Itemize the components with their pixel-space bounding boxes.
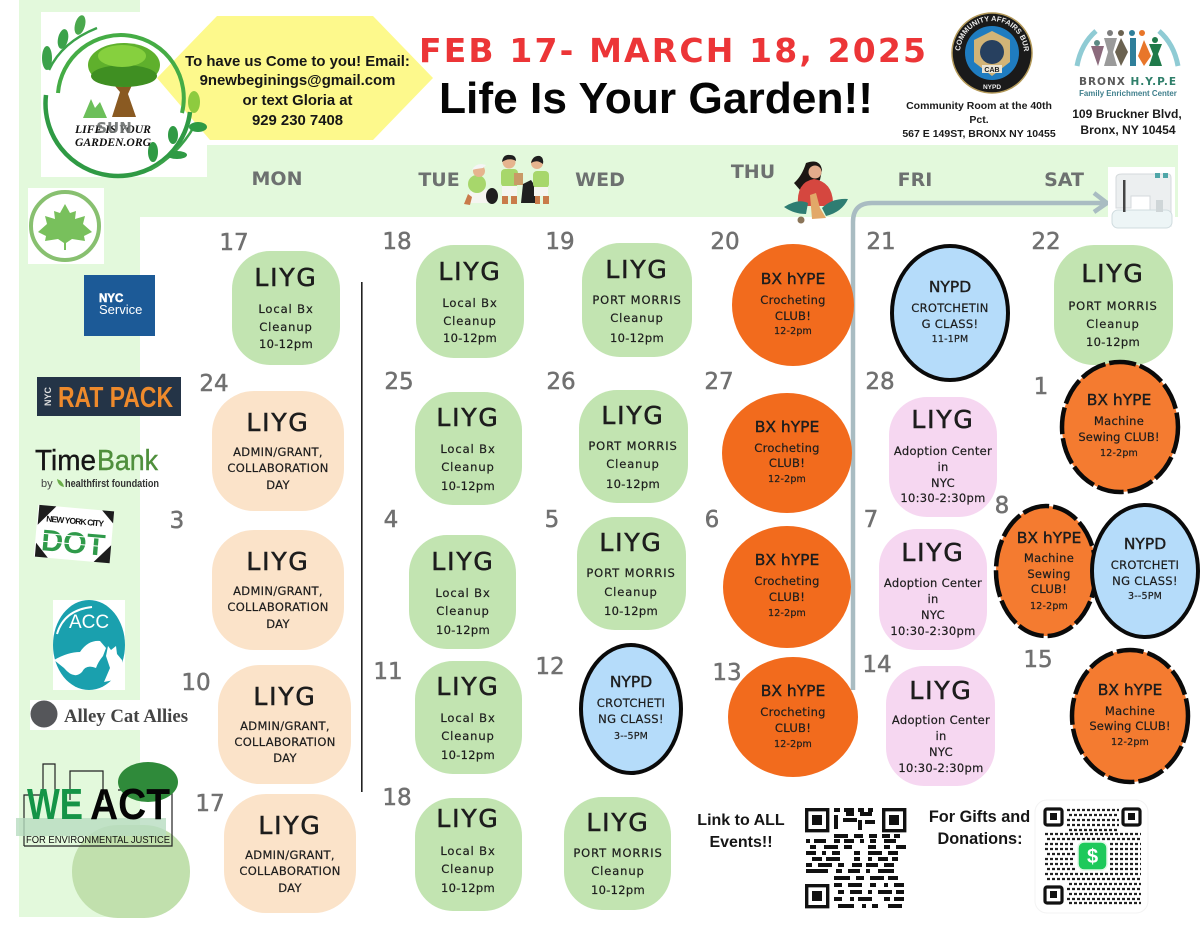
icon: people cleaning up	[464, 155, 549, 205]
event: Mar 3 admin: DAY	[266, 617, 290, 631]
event: Mar 11 cleanup: 10-12pm	[441, 748, 495, 762]
event: Mar 4 cleanup: Cleanup	[436, 604, 490, 618]
event: Mar 18 cleanup: Cleanup	[441, 862, 495, 876]
event: Mar 3 admin: ADMIN/GRANT,	[233, 584, 323, 598]
event: Mar 8 NYPD class	[1092, 505, 1198, 637]
event: Feb 25 cleanup: LIYG	[436, 403, 500, 432]
logo: ACC: ACC	[69, 612, 109, 633]
text: NYPD venue address: Pct.	[969, 114, 989, 126]
text: NYPD venue address: Community Room at the 40th	[906, 100, 1052, 112]
event: Mar 7 adoption: LIYG	[901, 538, 965, 567]
event: Mar 8 sewing: 12-2pm	[1030, 601, 1068, 612]
event: Feb 24 admin: LIYG	[246, 408, 310, 437]
date numbers: 17	[195, 791, 225, 817]
callout: contact hexagon: or text Gloria at	[242, 93, 353, 109]
standing person	[501, 169, 518, 187]
date numbers: 14	[862, 652, 892, 678]
date numbers: 10	[181, 670, 211, 696]
event: Feb 18 cleanup: 10-12pm	[443, 331, 497, 345]
event: Feb 27 crochet	[722, 393, 852, 513]
date numbers: 13	[712, 660, 742, 686]
event: Feb 18 cleanup: Local Bx	[442, 296, 498, 310]
date numbers: 17	[219, 230, 249, 256]
event: Mar 15 sewing: Sewing CLUB!	[1089, 719, 1171, 733]
event: Mar 13 crochet: 12-2pm	[774, 739, 812, 750]
logo: NYC DOT: DOT	[40, 524, 106, 563]
logo: NYPD Community Affairs badge: CAB	[984, 67, 1000, 74]
date numbers: 8	[995, 493, 1009, 519]
date numbers: 28	[865, 369, 895, 395]
event: Mar 8 sewing: BX hYPE	[1017, 529, 1081, 547]
text: link to all events: Link to ALL	[697, 812, 785, 829]
event: Feb 26 Port Morris: PORT MORRIS	[588, 439, 678, 453]
event: Mar 19 Port Morris: Cleanup	[591, 864, 645, 878]
date numbers	[170, 229, 1061, 817]
date numbers: 18	[382, 229, 412, 255]
date numbers: 22	[1031, 229, 1061, 255]
date numbers: 12	[535, 654, 565, 680]
date numbers: 3	[170, 508, 184, 534]
event: Feb 20 crochet: BX hYPE	[761, 270, 825, 288]
text: Bronx HYPE address	[1072, 107, 1182, 137]
text: gifts and donations	[929, 808, 1030, 848]
event: Feb 19 Port Morris: Cleanup	[610, 311, 664, 325]
event: Feb 25 cleanup	[415, 392, 522, 505]
event: Feb 28 adoption: in	[937, 460, 949, 474]
event: Feb 17 cleanup: Cleanup	[259, 320, 313, 334]
event: Mar 6 crochet: 12-2pm	[768, 608, 806, 619]
event: Feb 20 crochet: Crocheting	[760, 293, 826, 307]
event: Feb 19 Port Morris	[582, 243, 692, 357]
event: Mar 11 cleanup: LIYG	[436, 672, 500, 701]
event: Mar 1 sewing: 12-2pm	[1100, 448, 1138, 459]
event: Mar 8 sewing: CLUB!	[1031, 582, 1067, 596]
weekday headers	[252, 161, 1084, 191]
event: Feb 27 crochet: Crocheting	[754, 441, 820, 455]
event: Mar 19 Port Morris: 10-12pm	[591, 883, 645, 897]
text: link to all events	[697, 812, 785, 851]
event: Mar 1 sewing: BX hYPE	[1087, 391, 1151, 409]
event: Mar 5 Port Morris	[577, 517, 686, 630]
event: Mar 19 Port Morris: LIYG	[586, 808, 650, 837]
event: Feb 25 cleanup: Cleanup	[441, 460, 495, 474]
date numbers: 7	[864, 507, 878, 533]
event: Mar 13 crochet: Crocheting	[760, 705, 826, 719]
event: Mar 8 sewing: Machine	[1024, 551, 1074, 565]
event: Feb 24 admin: ADMIN/GRANT,	[233, 445, 323, 459]
event: Mar 8 NYPD class: 3--5PM	[1128, 591, 1162, 602]
event: Feb 21 NYPD class: 11-1PM	[932, 334, 968, 345]
QR code: Cash App: $	[1087, 846, 1098, 868]
event: Mar 15 sewing: Machine	[1105, 704, 1155, 718]
event: Mar 11 cleanup: Cleanup	[441, 729, 495, 743]
event: Feb 20 crochet: 12-2pm	[774, 326, 812, 337]
weekday band background	[140, 145, 1178, 217]
event: Mar 8 NYPD class: NYPD	[1124, 535, 1166, 553]
event: Feb 28 adoption: 10:30-2:30pm	[900, 491, 986, 505]
event: Feb 20 crochet	[732, 244, 854, 366]
event: Mar 5 Port Morris: Cleanup	[604, 585, 658, 599]
logo: Life Is Your Garden: LIFE IS YOUR	[74, 124, 151, 136]
event: Feb 18 cleanup: Cleanup	[443, 314, 497, 328]
event: Mar 15 sewing: BX hYPE	[1098, 681, 1162, 699]
event: Mar 12 NYPD class: NYPD	[610, 673, 652, 691]
event: Mar 3 admin	[212, 530, 344, 650]
event: Mar 7 adoption: Adoption Center	[884, 576, 982, 590]
event: Mar 10 admin: COLLABORATION	[234, 735, 336, 749]
event: Feb 17 cleanup: LIYG	[254, 263, 318, 292]
logo: Rat Pack: RAT PACK	[58, 382, 173, 414]
event: Mar 19 Port Morris: PORT MORRIS	[573, 846, 663, 860]
event: Mar 18 cleanup: LIYG	[436, 804, 500, 833]
event: Mar 6 crochet: CLUB!	[769, 590, 805, 604]
event: Mar 14 adoption: 10:30-2:30pm	[898, 761, 984, 775]
event: Feb 27 crochet: CLUB!	[769, 456, 805, 470]
title: Life Is Your Garden!!	[439, 74, 873, 123]
event: Feb 28 adoption: LIYG	[911, 405, 975, 434]
date numbers: 18	[382, 785, 412, 811]
event: Feb 26 Port Morris: 10-12pm	[606, 477, 660, 491]
logo: NYC DOT	[34, 505, 114, 563]
event: Mar 11 cleanup	[415, 661, 522, 774]
event: Mar 1 sewing: Sewing CLUB!	[1078, 430, 1160, 444]
event: Feb 24 admin	[212, 391, 344, 511]
date numbers: 24	[199, 371, 229, 397]
event: Feb 18 cleanup	[416, 245, 524, 358]
event: Mar 14 adoption: in	[935, 729, 947, 743]
event: Mar 8 NYPD class: NG CLASS!	[1112, 574, 1178, 588]
text: Bronx HYPE address: 109 Bruckner Blvd,	[1072, 107, 1182, 121]
event: Mar 18 cleanup: 10-12pm	[441, 881, 495, 895]
third person	[533, 171, 549, 188]
text: Bronx HYPE address: Bronx, NY 10454	[1080, 123, 1176, 137]
logo: TimeBank: by	[41, 478, 53, 490]
logo: Life Is Your Garden	[42, 14, 207, 176]
QR code: Cash App	[1035, 800, 1148, 913]
event: Mar 5 Port Morris: 10-12pm	[604, 604, 658, 618]
divider line	[361, 282, 363, 792]
event: Feb 21 NYPD class	[892, 246, 1008, 380]
event: Mar 1 sewing: Machine	[1094, 414, 1144, 428]
event: Feb 27 crochet: 12-2pm	[768, 474, 806, 485]
event: Feb 21 NYPD class: CROTCHETIN	[911, 301, 989, 315]
event: Feb 17 cleanup	[232, 251, 340, 365]
event: Feb 17 cleanup: Local Bx	[258, 302, 314, 316]
event: Feb 24 admin: DAY	[266, 478, 290, 492]
logo: ACC	[53, 600, 125, 690]
event: Mar 4 cleanup	[409, 535, 516, 649]
logo: NYC Service: NYC	[99, 293, 123, 305]
logo: Bronx HYPE	[1077, 30, 1178, 98]
icon: woman crocheting	[784, 162, 848, 224]
logo: TimeBank: healthfirst foundation	[65, 478, 159, 490]
event: Feb 26 Port Morris: Cleanup	[606, 457, 660, 471]
event: Feb 22 Port Morris: 10-12pm	[1086, 335, 1140, 349]
event: Feb 19 Port Morris: LIYG	[605, 255, 669, 284]
event: Feb 18 cleanup: LIYG	[438, 257, 502, 286]
logo: NYPD Community Affairs badge	[951, 12, 1033, 94]
event: Feb 28 adoption	[889, 397, 997, 517]
event: Feb 21 NYPD class: G CLASS!	[922, 317, 978, 331]
event: Mar 4 cleanup: Local Bx	[435, 586, 491, 600]
event: Feb 19 Port Morris: 10-12pm	[610, 331, 664, 345]
event: Mar 12 NYPD class: NG CLASS!	[598, 712, 664, 726]
date numbers: 21	[866, 229, 896, 255]
text: NYPD venue address: 567 E 149ST, BRONX NY 10455	[902, 128, 1056, 140]
logo: NYPD Community Affairs badge: NYPD	[983, 84, 1001, 91]
logo: Rat Pack	[37, 377, 181, 416]
date numbers: 20	[710, 229, 740, 255]
event: Feb 26 Port Morris: LIYG	[601, 401, 665, 430]
logo: Alley Cat Allies: Alley Cat Allies	[64, 707, 188, 727]
event: Mar 12 NYPD class: CROTCHETI	[597, 696, 665, 710]
logo: WE ACT: WE	[27, 780, 83, 829]
logo: TimeBank: Bank	[97, 445, 158, 477]
event: Mar 5 Port Morris: PORT MORRIS	[586, 566, 676, 580]
event: Mar 5 Port Morris: LIYG	[599, 528, 663, 557]
event: Mar 6 crochet: BX hYPE	[755, 551, 819, 569]
event: Feb 28 adoption: Adoption Center	[894, 444, 992, 458]
text: link to all events: Events!!	[709, 834, 773, 851]
QR code: all events	[805, 807, 906, 908]
icon: sewing machine	[1108, 167, 1175, 231]
green decorative blob	[72, 825, 190, 918]
event: Mar 15 sewing: 12-2pm	[1111, 737, 1149, 748]
event: Mar 7 adoption: NYC	[921, 608, 945, 622]
event: Mar 15 sewing	[1072, 650, 1188, 782]
event: Mar 17 admin: DAY	[278, 881, 302, 895]
event: Mar 12 NYPD class	[581, 645, 681, 773]
date numbers: 5	[545, 507, 559, 533]
event: Mar 4 cleanup: LIYG	[431, 547, 495, 576]
event: Mar 13 crochet	[728, 657, 858, 777]
logo: WE ACT	[16, 762, 178, 846]
logo: NYC Service	[84, 275, 155, 336]
event: Mar 18 cleanup	[415, 798, 522, 911]
event: Mar 3 admin: COLLABORATION	[227, 600, 329, 614]
event: Mar 12 NYPD class: 3--5PM	[614, 731, 648, 742]
event: Mar 10 admin: ADMIN/GRANT,	[240, 719, 330, 733]
event: Mar 17 admin: COLLABORATION	[239, 864, 341, 878]
callout: contact hexagon: 929 230 7408	[252, 113, 343, 129]
event: Mar 14 adoption: LIYG	[909, 676, 973, 705]
logo: Bronx HYPE: Family Enrichment Center	[1079, 89, 1177, 98]
event: Feb 19 Port Morris: PORT MORRIS	[592, 293, 682, 307]
event: Feb 25 cleanup: 10-12pm	[441, 479, 495, 493]
weekday headers: THU	[731, 161, 775, 183]
event: Mar 18 cleanup: Local Bx	[440, 844, 496, 858]
date numbers: 26	[546, 369, 576, 395]
event: Mar 10 admin	[218, 665, 351, 784]
event: Mar 13 crochet: CLUB!	[775, 721, 811, 735]
date numbers: 15	[1023, 647, 1053, 673]
logo: NYC DOT: NEW YORK CITY	[46, 514, 105, 529]
event: Feb 26 Port Morris	[579, 390, 688, 503]
event: Feb 17 cleanup: 10-12pm	[259, 337, 313, 351]
event: Feb 22 Port Morris	[1054, 245, 1173, 365]
event: Mar 4 cleanup: 10-12pm	[436, 623, 490, 637]
logo: NYC Parks	[28, 188, 104, 264]
logo: WE ACT: FOR ENVIRONMENTAL JUSTICE	[26, 834, 170, 846]
event: Mar 7 adoption	[879, 529, 987, 650]
event: Mar 8 sewing	[996, 506, 1096, 636]
event: Mar 10 admin: LIYG	[253, 682, 317, 711]
event: Mar 7 adoption: 10:30-2:30pm	[890, 624, 976, 638]
logo: WE ACT: ACT	[90, 780, 170, 829]
date numbers: 27	[704, 369, 734, 395]
event: Feb 22 Port Morris: Cleanup	[1086, 317, 1140, 331]
arrow: grey route line to sewing machine	[853, 193, 1107, 690]
event: Feb 22 Port Morris: LIYG	[1081, 259, 1145, 288]
date numbers: 4	[384, 507, 398, 533]
logo: Bronx HYPE: BRONX H.Y.P.E	[1079, 76, 1177, 88]
text: NYPD venue address	[902, 100, 1056, 140]
event: Mar 6 crochet	[723, 526, 851, 648]
kneeling person	[465, 188, 490, 203]
text: gifts and donations: For Gifts and	[929, 808, 1030, 826]
event: Mar 10 admin: DAY	[273, 751, 297, 765]
event: Feb 25 cleanup: Local Bx	[440, 442, 496, 456]
event: Feb 28 adoption: NYC	[931, 476, 955, 490]
event: Feb 27 crochet: BX hYPE	[755, 418, 819, 436]
weekday headers: SAT	[1044, 169, 1084, 191]
event: Mar 14 adoption	[886, 666, 995, 786]
logo: Life Is Your Garden: GARDEN.ORG	[75, 137, 152, 149]
event: Mar 3 admin: LIYG	[246, 547, 310, 576]
event: Mar 13 crochet: BX hYPE	[761, 682, 825, 700]
logo: Alley Cat Allies	[30, 700, 190, 730]
title date: FEB 17- MARCH 18, 2025	[419, 31, 926, 70]
logo: TimeBank: Time	[35, 445, 96, 477]
event: Mar 14 adoption: NYC	[929, 745, 953, 759]
event: Mar 19 Port Morris	[564, 797, 671, 910]
logo: Rat Pack: NYC	[43, 386, 53, 406]
date numbers: 6	[705, 507, 719, 533]
date numbers: 19	[545, 229, 575, 255]
event: Feb 20 crochet: CLUB!	[775, 309, 811, 323]
event: Mar 7 adoption: in	[927, 592, 939, 606]
callout: contact hexagon: To have us Come to you! Email:	[185, 54, 410, 70]
weekday headers: FRI	[898, 169, 932, 191]
callout: contact hexagon	[157, 16, 433, 140]
callout: contact hexagon: 9newbeginings@gmail.com	[200, 73, 395, 89]
date numbers: 1	[1034, 374, 1048, 400]
event: Mar 1 sewing	[1062, 362, 1178, 492]
event: Mar 8 sewing: Sewing	[1027, 567, 1071, 581]
logo: Life Is Your Garden: SUN	[96, 119, 132, 137]
text: gifts and donations: Donations:	[937, 830, 1023, 848]
left green column	[19, 0, 140, 917]
event: Mar 17 admin: ADMIN/GRANT,	[245, 848, 335, 862]
weekday headers: WED	[575, 169, 625, 191]
event: Feb 22 Port Morris: PORT MORRIS	[1068, 299, 1158, 313]
date numbers: 11	[373, 659, 403, 685]
weekday headers: TUE	[418, 169, 460, 191]
event: Mar 6 crochet: Crocheting	[754, 574, 820, 588]
event: Mar 17 admin	[224, 794, 356, 913]
event: Mar 14 adoption: Adoption Center	[892, 713, 990, 727]
logo: TimeBank	[35, 445, 159, 490]
event: Mar 8 NYPD class: CROTCHETI	[1111, 558, 1179, 572]
event: Mar 17 admin: LIYG	[258, 811, 322, 840]
event: Feb 24 admin: COLLABORATION	[227, 461, 329, 475]
event: Feb 21 NYPD class: NYPD	[929, 278, 971, 296]
event: Mar 11 cleanup: Local Bx	[440, 711, 496, 725]
logo: NYC Service: Service	[99, 302, 142, 317]
date numbers: 25	[384, 369, 414, 395]
weekday headers: MON	[252, 168, 302, 190]
